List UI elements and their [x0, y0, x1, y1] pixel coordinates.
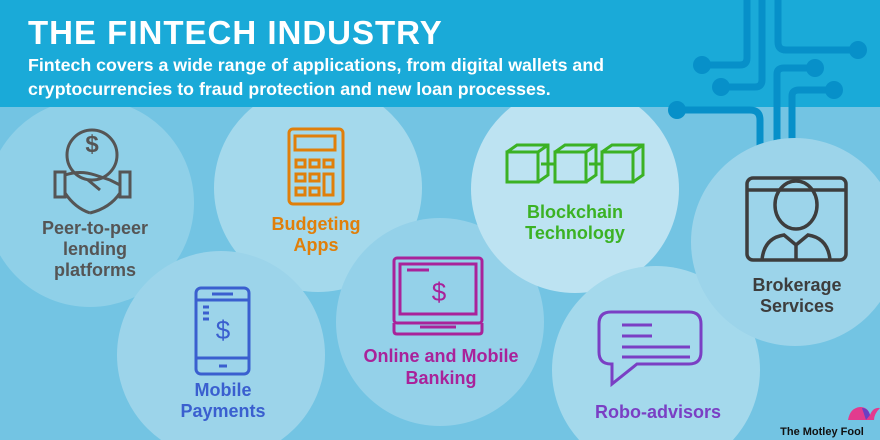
subtitle: cryptocurrencies to fraud protection and new loan processes. — [28, 79, 551, 99]
panel: budgeting apps: Budgeting — [272, 214, 360, 234]
header band — [0, 0, 880, 107]
panel: blockchain technology: Blockchain — [527, 202, 623, 222]
icon: circuit traces — [668, 0, 867, 150]
panel: mobile payments: Payments — [180, 401, 266, 421]
panel: brokerage services: Brokerage — [752, 275, 842, 295]
panel: robo-advisors — [552, 266, 760, 440]
panel: blockchain technology: Technology — [525, 223, 625, 243]
panel: mobile payments — [117, 251, 325, 440]
panel: online and mobile banking: $ — [432, 277, 447, 307]
panel: peer-to-peer lending: Peer-to-peer — [42, 218, 148, 238]
panel: brokerage services: Services — [760, 296, 834, 316]
panel: budgeting apps — [214, 107, 422, 292]
subtitle — [28, 55, 604, 99]
panel: robo-advisors: Robo-advisors — [595, 402, 721, 422]
subtitle: Fintech covers a wide range of applications, from digital wallets and — [28, 55, 604, 75]
panel: peer-to-peer lending: platforms — [54, 260, 136, 280]
panel: peer-to-peer lending: $ — [85, 131, 99, 158]
panel: peer-to-peer lending: lending — [63, 239, 127, 259]
panel: blockchain technology — [471, 107, 679, 293]
panel: brokerage services — [691, 138, 880, 346]
panel: online and mobile banking — [336, 218, 544, 426]
panel: online and mobile banking: Online and Mobile — [363, 346, 519, 366]
panel: budgeting apps: Apps — [294, 235, 338, 255]
logo: The Motley Fool: The Motley Fool — [780, 426, 864, 438]
panel: online and mobile banking: Banking — [405, 368, 477, 388]
title: THE FINTECH INDUSTRY — [28, 14, 443, 51]
panel: mobile payments: Mobile — [194, 380, 252, 400]
logo: The Motley Fool — [780, 407, 880, 438]
panel: mobile payments: $ — [216, 315, 231, 345]
panel: peer-to-peer lending — [0, 99, 194, 307]
